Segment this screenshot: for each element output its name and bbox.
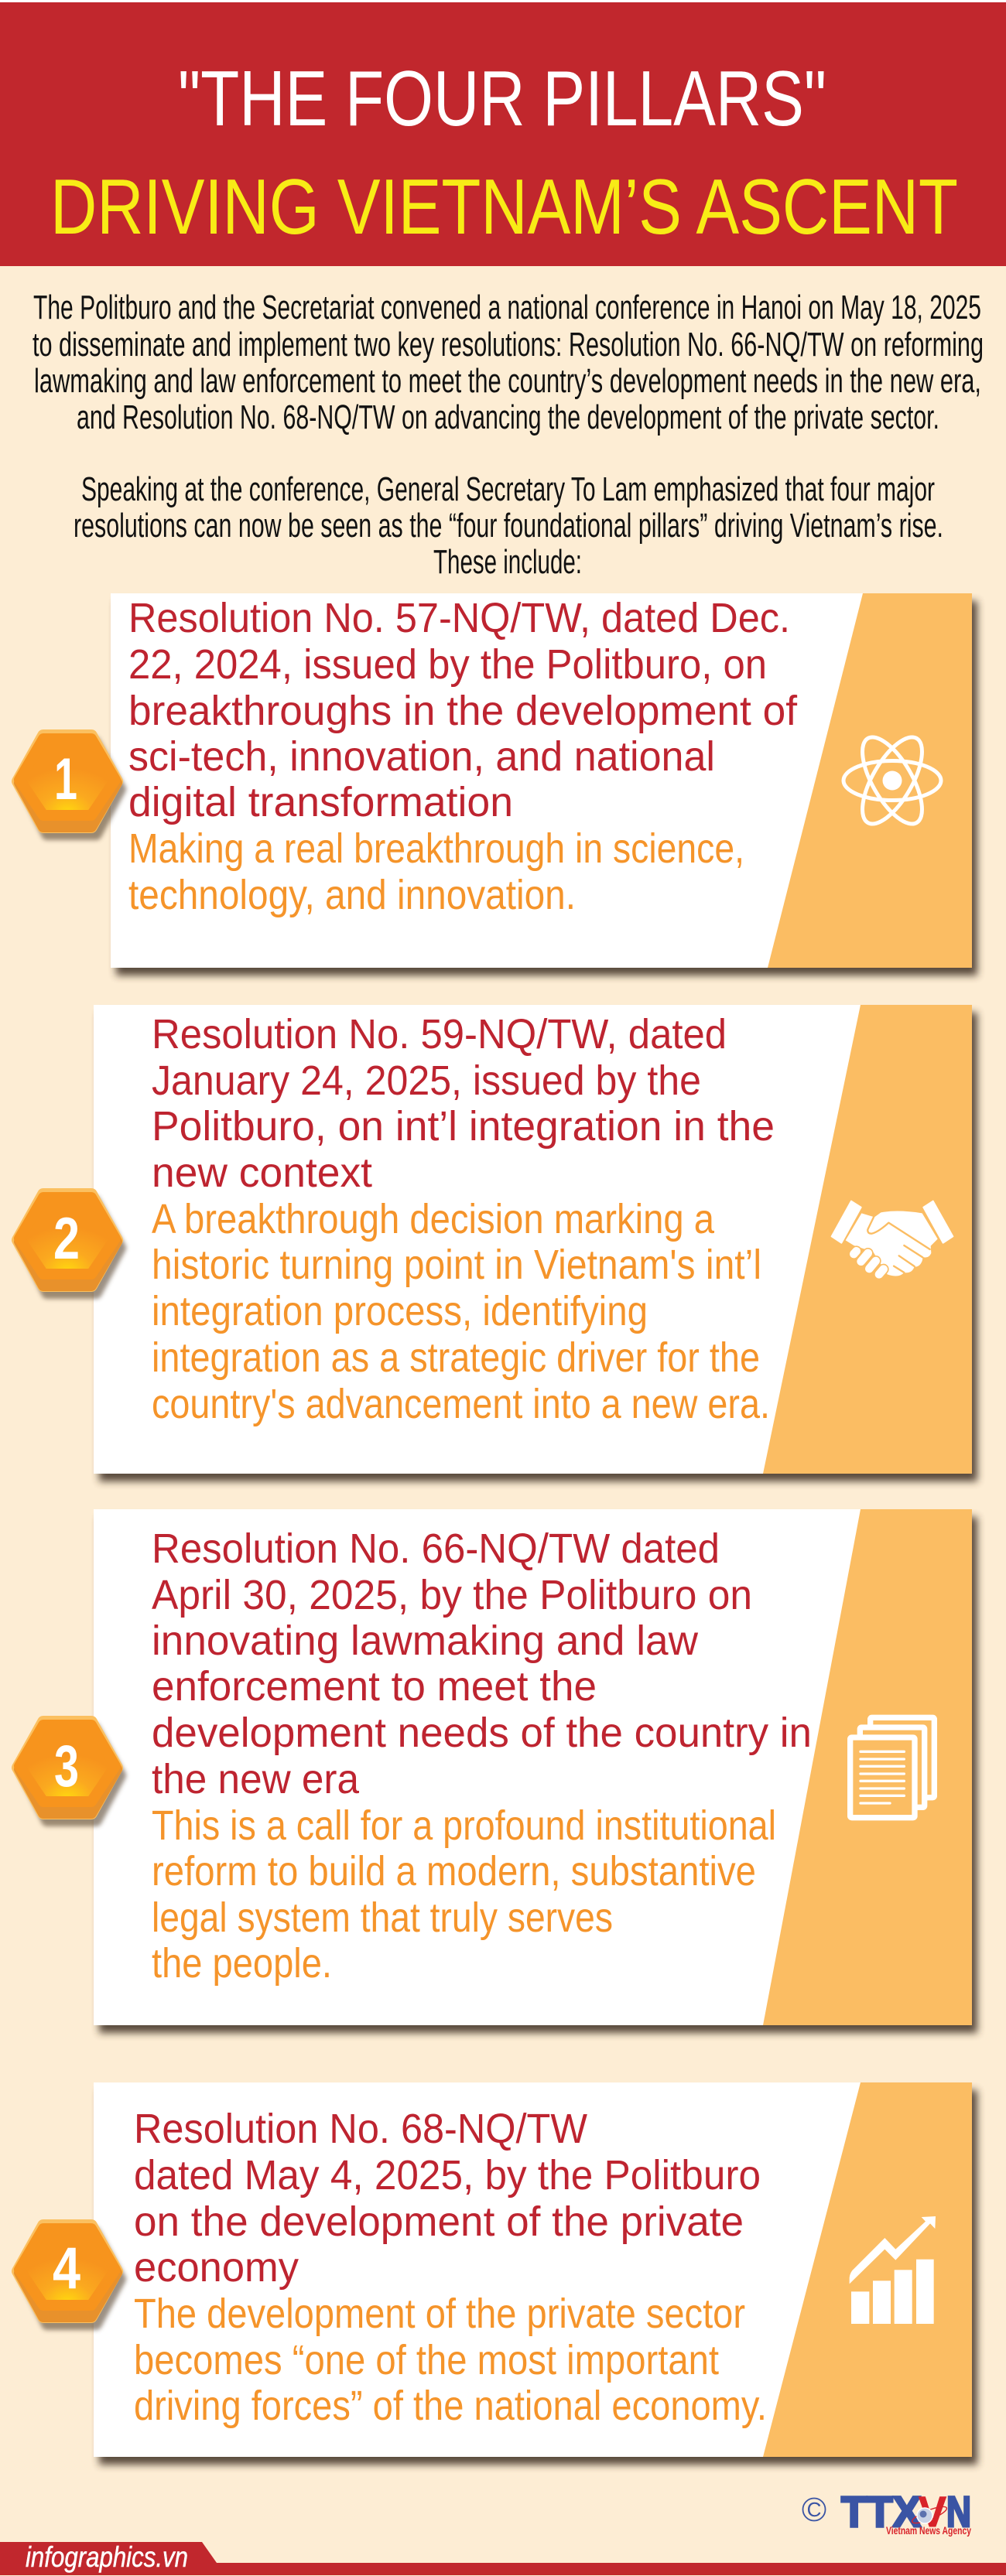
resolution 66 heading: the new era [152, 1756, 360, 1802]
resolution 59 summary: integration as a strategic driver for the [152, 1334, 760, 1381]
resolution 57 heading: sci-tech, innovation, and national [128, 733, 715, 780]
resolution 57 heading: breakthroughs in the development of [128, 688, 798, 734]
resolution 59 heading: Politburo, on int’l integration in the [152, 1103, 775, 1150]
resolution 68 heading: on the development of the private [134, 2198, 744, 2245]
resolution 66 heading: Resolution No. 66-NQ/TW dated [152, 1525, 720, 1572]
logo: TTXVN Vietnam News Agency: TTX [841, 2487, 921, 2536]
logo: TTXVN Vietnam News Agency: Vietnam News Agency [886, 2524, 971, 2537]
resolution 57 summary [128, 825, 744, 918]
badge: number 1 [18, 736, 120, 834]
resolution 59 summary [152, 1196, 770, 1427]
resolution 68 summary: The development of the private sector [134, 2291, 745, 2337]
intro paragraph 2: These include: [433, 543, 582, 581]
footer band [0, 2541, 1006, 2575]
resolution 66 heading: innovating lawmaking and law [152, 1618, 699, 1664]
resolution 59 summary: integration process, identifying [152, 1288, 648, 1334]
copyright mark: C [807, 2498, 821, 2521]
badge: number 1: 1 [54, 746, 77, 812]
badge: number 3: 3 [54, 1734, 79, 1799]
logo: TTXVN Vietnam News Agency: V [919, 2487, 946, 2536]
header banner [0, 2, 1006, 266]
resolution 57 heading: digital transformation [128, 779, 513, 825]
badge: number 2 [18, 1194, 120, 1293]
icon: growth chart [850, 2216, 936, 2324]
resolution 57 summary: technology, and innovation. [128, 872, 576, 918]
resolution 59 heading: Resolution No. 59-NQ/TW, dated [152, 1011, 727, 1057]
footer site name: infographics.vn [26, 2541, 188, 2573]
icon: atom [843, 729, 941, 832]
resolution 59 summary: A breakthrough decision marking a [152, 1196, 715, 1242]
logo: TTXVN Vietnam News Agency [803, 2487, 971, 2537]
resolution 68 heading: Resolution No. 68-NQ/TW [134, 2106, 587, 2152]
panel: resolution 68 [94, 2082, 977, 2465]
resolution 57 heading [128, 595, 798, 825]
icon: handshake [832, 1201, 953, 1276]
resolution 68 heading [134, 2106, 761, 2291]
resolution 66 summary: legal system that truly serves [152, 1894, 613, 1941]
resolution 66 summary: This is a call for a profound institutional [152, 1802, 776, 1849]
badge: number 4: 4 [53, 2236, 80, 2301]
intro paragraph 1 [33, 289, 984, 436]
resolution 66 summary: reform to build a modern, substantive [152, 1848, 756, 1894]
badge: number 3 [18, 1722, 120, 1820]
badge: number 4 [18, 2226, 120, 2324]
panel: resolution 66 [94, 1509, 977, 2033]
badge: number 2: 2 [53, 1206, 80, 1272]
resolution 66 heading [152, 1525, 812, 1802]
resolution 68 heading: dated May 4, 2025, by the Politburo [134, 2152, 761, 2198]
panel: resolution 59 [94, 1005, 977, 1481]
resolution 57 heading: 22, 2024, issued by the Politburo, on [128, 641, 767, 688]
resolution 68 summary: becomes “one of the most important [134, 2337, 719, 2383]
resolution 59 summary: historic turning point in Vietnam's int’l [152, 1242, 761, 1288]
logo: TTXVN Vietnam News Agency: N [946, 2487, 971, 2536]
title line 1: "THE FOUR PILLARS" [178, 56, 826, 142]
resolution 57 summary: Making a real breakthrough in science, [128, 825, 744, 872]
resolution 59 heading [152, 1011, 775, 1196]
resolution 66 summary: the people. [152, 1940, 332, 1987]
resolution 66 heading: development needs of the country in [152, 1710, 812, 1756]
resolution 59 summary: country's advancement into a new era. [152, 1381, 770, 1427]
resolution 68 summary: driving forces” of the national economy. [134, 2383, 767, 2429]
icon: documents [850, 1717, 934, 1818]
intro paragraph 2 [74, 470, 943, 581]
resolution 66 heading: enforcement to meet the [152, 1663, 597, 1710]
resolution 66 heading: April 30, 2025, by the Politburo on [152, 1572, 752, 1618]
resolution 59 heading: January 24, 2025, issued by the [152, 1057, 701, 1104]
resolution 68 summary [134, 2291, 767, 2429]
panel: resolution 57 [111, 593, 977, 975]
copyright mark [803, 2498, 825, 2521]
resolution 66 summary [152, 1802, 776, 1987]
resolution 57 heading: Resolution No. 57-NQ/TW, dated Dec. [128, 595, 790, 641]
resolution 68 heading: economy [134, 2244, 299, 2291]
resolution 59 heading: new context [152, 1150, 372, 1196]
